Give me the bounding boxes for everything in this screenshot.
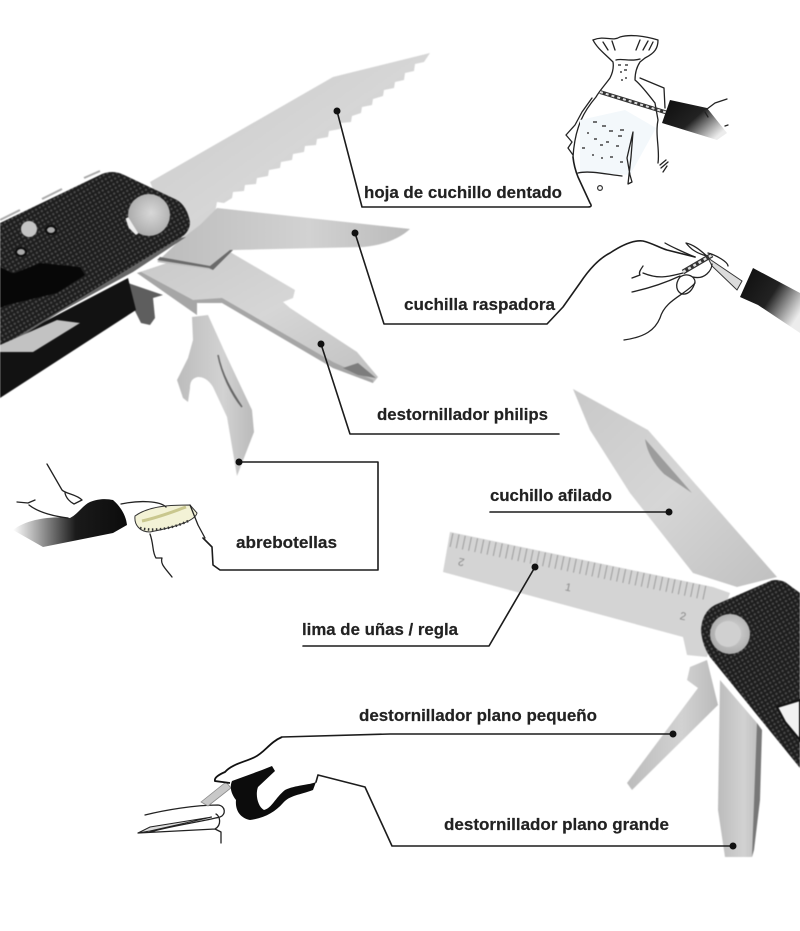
- serrated blade: [150, 53, 430, 248]
- large flat screwdriver: [718, 680, 761, 857]
- multitool: lower right knife: [443, 389, 800, 857]
- cap serration: [140, 520, 190, 530]
- rivets: [21, 221, 37, 237]
- tool blade: [201, 782, 231, 806]
- illustration: bottle cap: [13, 464, 205, 577]
- hand fingers: [632, 243, 695, 292]
- leader dot: [318, 340, 324, 348]
- cut-out in handle: [0, 263, 85, 308]
- fins: [566, 98, 668, 184]
- handle blade tip: [0, 320, 80, 352]
- ruler ticks: [451, 540, 706, 593]
- ruler file: [443, 532, 730, 657]
- label text: destornillador philips: [377, 406, 548, 424]
- fish body tint: [580, 110, 656, 175]
- label: lima de uñas / regla: [302, 564, 538, 646]
- ruler numbers: 2: [457, 555, 466, 568]
- hand lines: [17, 464, 82, 518]
- illustration: fish scaling: [566, 36, 728, 190]
- textured handle: [701, 580, 800, 768]
- leader line: [490, 511, 669, 513]
- black handle: [13, 499, 127, 547]
- leader line: [355, 233, 695, 324]
- label text: cuchilla raspadora: [404, 296, 556, 314]
- pivot screw: [128, 194, 170, 236]
- leader line: [282, 734, 673, 737]
- leader line: [303, 567, 535, 646]
- lower black scale: [0, 278, 136, 398]
- leader dot: [730, 842, 736, 850]
- upper handle with texture: [0, 172, 190, 347]
- leader dot: [670, 730, 676, 738]
- leader line: [337, 111, 591, 207]
- label: destornillador philips: [318, 340, 559, 434]
- label text: lima de uñas / regla: [302, 621, 459, 639]
- ruler numbers: 2: [679, 610, 687, 623]
- black handle: [231, 766, 316, 820]
- ruler numbers: 1: [564, 582, 572, 595]
- bottle opener: [177, 315, 254, 476]
- illustration: hand with large screwdriver: [138, 737, 316, 843]
- multitool: upper left knife: [0, 53, 430, 476]
- blade fuller: [645, 439, 692, 493]
- leader dot: [236, 458, 242, 466]
- label: destornillador plano grande: [316, 775, 736, 850]
- label: cuchilla raspadora: [352, 230, 695, 324]
- leader dot: [532, 564, 538, 570]
- small flat screwdriver: [627, 660, 718, 790]
- sharp knife blade: [573, 389, 777, 587]
- hand lines: [705, 99, 728, 126]
- leader dot: [334, 108, 340, 114]
- label: hoja de cuchillo dentado: [334, 108, 591, 207]
- small lever tool: [128, 283, 163, 325]
- label: cuchillo afilado: [490, 487, 672, 516]
- serrated blade on fish: [600, 92, 668, 113]
- black tool handle: [662, 100, 727, 140]
- hand thumb: [677, 275, 695, 294]
- tail fan lines: [603, 40, 653, 60]
- label text: cuchillo afilado: [490, 487, 612, 505]
- pivot screw: [710, 614, 750, 654]
- label text: hoja de cuchillo dentado: [364, 184, 562, 202]
- label: abrebotellas: [203, 458, 378, 570]
- label text: destornillador plano grande: [444, 816, 669, 834]
- label text: destornillador plano pequeño: [359, 707, 597, 725]
- fish outline: [593, 36, 658, 163]
- leader line: [316, 775, 733, 846]
- tool body: [708, 258, 742, 290]
- label: destornillador plano pequeño: [282, 707, 676, 738]
- hand outline: [215, 737, 282, 783]
- blade in hand: [686, 243, 707, 256]
- label text: abrebotellas: [236, 534, 337, 552]
- handle top silver edge: [0, 171, 100, 220]
- leader dot: [352, 230, 358, 236]
- philips screwdriver: [137, 252, 378, 383]
- thumb nail: [138, 805, 224, 843]
- bottle cap top: [135, 505, 197, 532]
- fish scales: [582, 65, 628, 162]
- blade pivot edge: [172, 222, 213, 250]
- scraper blade: [157, 208, 410, 270]
- leader line: [203, 462, 378, 570]
- fish eye: [598, 186, 602, 190]
- illustration: hand scraping: [624, 243, 800, 340]
- handle slot: [777, 700, 800, 740]
- leader dot: [666, 508, 672, 516]
- black handle: [740, 268, 800, 333]
- leader line: [321, 344, 559, 434]
- handle silver edge: [0, 237, 186, 350]
- ruler numbers: [457, 555, 687, 623]
- bottle neck: [121, 502, 205, 577]
